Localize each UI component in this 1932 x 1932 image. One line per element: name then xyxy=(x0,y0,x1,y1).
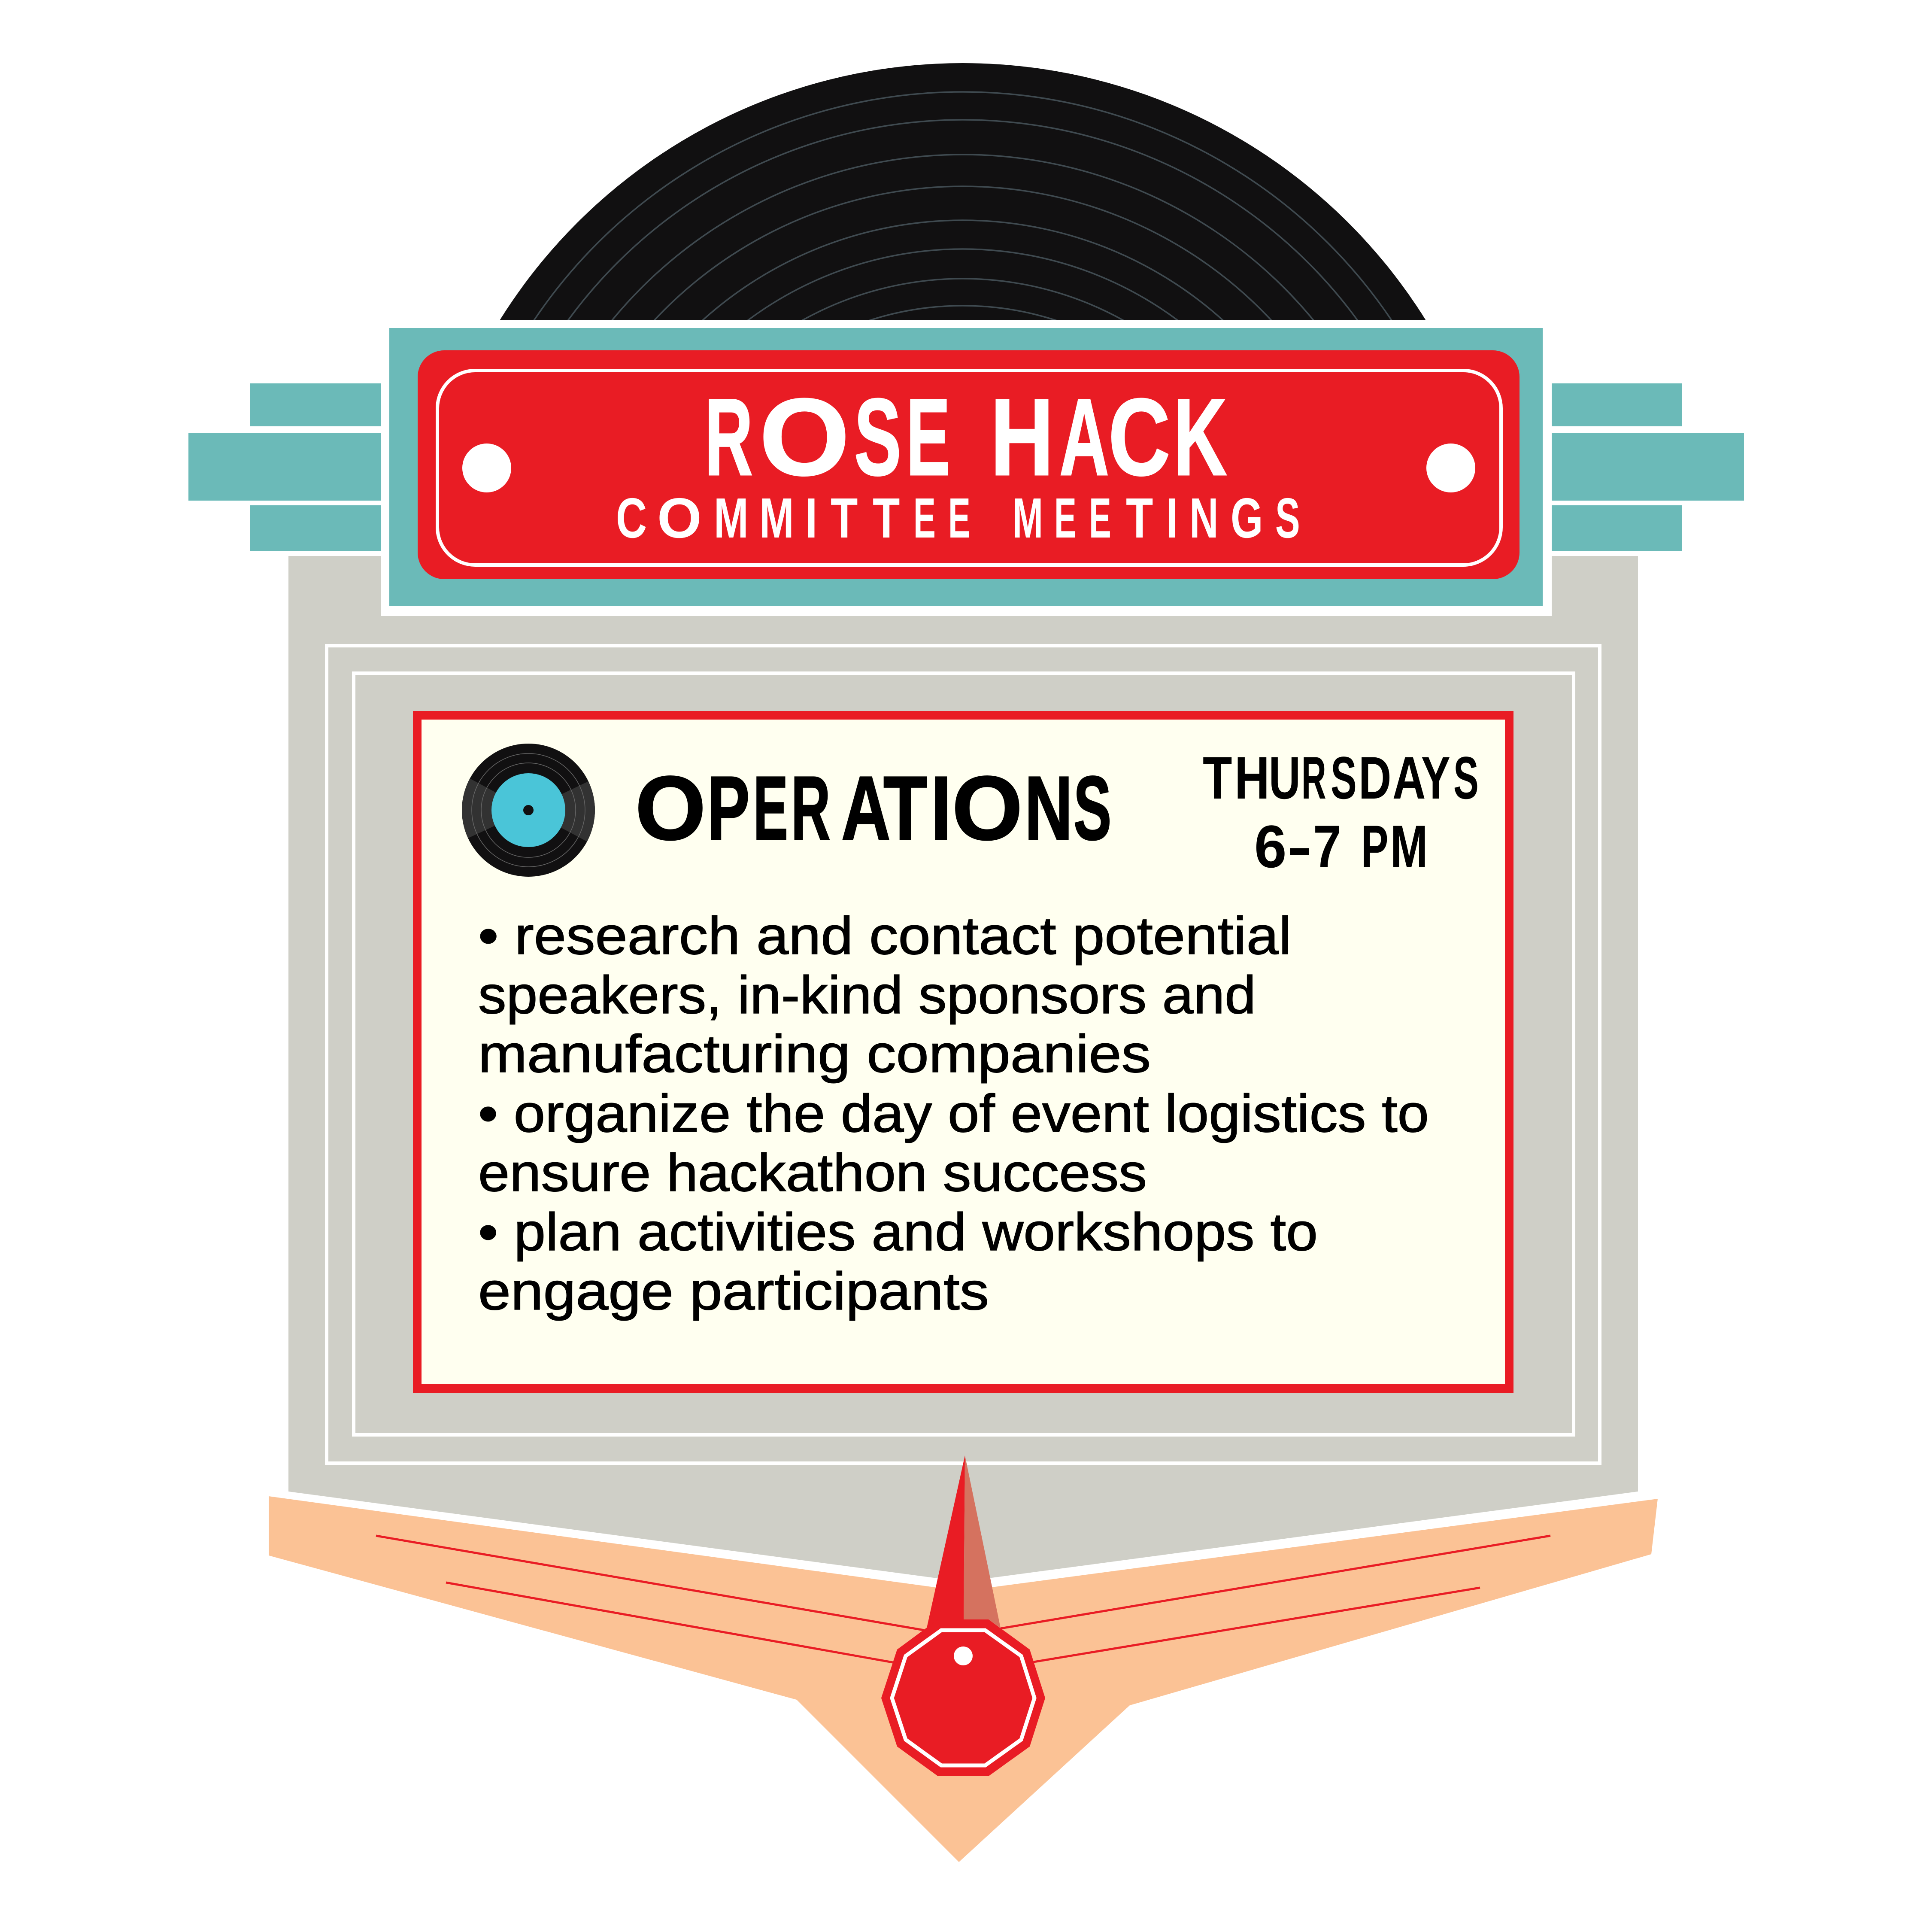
schedule: day: S xyxy=(1331,744,1357,811)
schedule: time xyxy=(1254,817,1426,877)
schedule: day: Y xyxy=(1421,744,1450,811)
subtitle: COMMITTEE MEETINGS: E xyxy=(913,486,936,550)
side bars: left teal xyxy=(188,383,381,551)
subtitle: COMMITTEE MEETINGS: T xyxy=(1126,486,1153,550)
side bars: right teal xyxy=(1552,383,1744,551)
icon: red jukebox dial with needle xyxy=(881,1455,1045,1776)
heading: OPERATIONS: I xyxy=(931,757,952,859)
title: ROSE HACK: E xyxy=(906,376,950,498)
panel: title marquee xyxy=(381,320,1552,616)
subtitle: COMMITTEE MEETINGS: S xyxy=(1275,486,1300,550)
subtitle: COMMITTEE MEETINGS: E xyxy=(1089,486,1111,550)
subtitle: COMMITTEE MEETINGS: T xyxy=(831,486,858,550)
text block: operations duties: • research and contact potential xyxy=(478,906,1292,966)
panel: cream content card xyxy=(417,715,1509,1388)
heading: OPERATIONS: A xyxy=(841,757,891,859)
heading: OPERATIONS: S xyxy=(1074,757,1111,859)
text block: operations duties: engage participants xyxy=(478,1262,989,1321)
panel: peach base wings xyxy=(269,1496,1658,1862)
heading: OPERATIONS: O xyxy=(635,757,706,859)
subtitle: COMMITTEE MEETINGS: C xyxy=(616,486,647,550)
title: ROSE HACK: K xyxy=(1174,376,1227,498)
schedule: day: A xyxy=(1392,744,1425,811)
heading: OPERATIONS: N xyxy=(1025,757,1073,859)
text block: operations duties xyxy=(478,906,1429,1321)
subtitle: COMMITTEE MEETINGS: N xyxy=(1189,486,1219,550)
heading: OPERATIONS: P xyxy=(707,757,750,859)
subtitle: COMMITTEE MEETINGS: G xyxy=(1231,486,1263,550)
title: ROSE HACK: S xyxy=(854,376,901,498)
schedule: day xyxy=(1203,748,1477,808)
text block: operations duties: ensure hackathon success xyxy=(478,1143,1147,1203)
title: ROSE HACK: A xyxy=(1059,376,1109,498)
icon: small vinyl record xyxy=(462,744,595,877)
schedule: time: 7 xyxy=(1313,813,1341,880)
schedule: time: - xyxy=(1287,813,1312,880)
subtitle: COMMITTEE MEETINGS: I xyxy=(1166,486,1178,550)
text block: operations duties: • plan activities and workshops to xyxy=(478,1203,1318,1262)
icon: vinyl record arc xyxy=(500,63,1426,320)
schedule: day: T xyxy=(1203,744,1232,811)
title: ROSE HACK: R xyxy=(705,376,753,498)
schedule: time: P xyxy=(1361,813,1389,880)
subtitle: COMMITTEE MEETINGS: M xyxy=(714,486,749,550)
schedule: day: S xyxy=(1453,744,1479,811)
schedule: day: R xyxy=(1301,744,1326,811)
schedule: day: H xyxy=(1234,744,1270,811)
text block: operations duties: speakers, in-kind sponsors and xyxy=(478,966,1256,1025)
heading: OPERATIONS: T xyxy=(883,757,927,859)
schedule: time: M xyxy=(1390,813,1428,880)
schedule: day: U xyxy=(1269,744,1301,811)
schedule: time: 6 xyxy=(1254,813,1287,880)
heading: OPERATIONS: E xyxy=(753,757,788,859)
subtitle: COMMITTEE MEETINGS xyxy=(616,490,1298,547)
panel: grey jukebox body xyxy=(288,556,1638,1582)
heading: OPERATIONS: O xyxy=(952,757,1022,859)
schedule: day: D xyxy=(1359,744,1391,811)
subtitle: COMMITTEE MEETINGS: M xyxy=(759,486,794,550)
subtitle: COMMITTEE MEETINGS: E xyxy=(948,486,971,550)
heading: OPERATIONS xyxy=(635,763,1110,854)
subtitle: COMMITTEE MEETINGS: T xyxy=(873,486,900,550)
title: ROSE HACK: C xyxy=(1108,376,1170,498)
subtitle: COMMITTEE MEETINGS: M xyxy=(1013,486,1043,550)
title: ROSE HACK xyxy=(705,383,1227,492)
subtitle: COMMITTEE MEETINGS: O xyxy=(657,486,702,550)
text block: operations duties: manufacturing companies xyxy=(478,1024,1151,1084)
title: ROSE HACK: H xyxy=(990,376,1054,498)
heading: OPERATIONS: R xyxy=(791,757,830,859)
subtitle: COMMITTEE MEETINGS: E xyxy=(1054,486,1077,550)
title: ROSE HACK: O xyxy=(759,376,849,498)
subtitle: COMMITTEE MEETINGS: I xyxy=(805,486,817,550)
text block: operations duties: • organize the day of event logistics to xyxy=(478,1084,1429,1143)
